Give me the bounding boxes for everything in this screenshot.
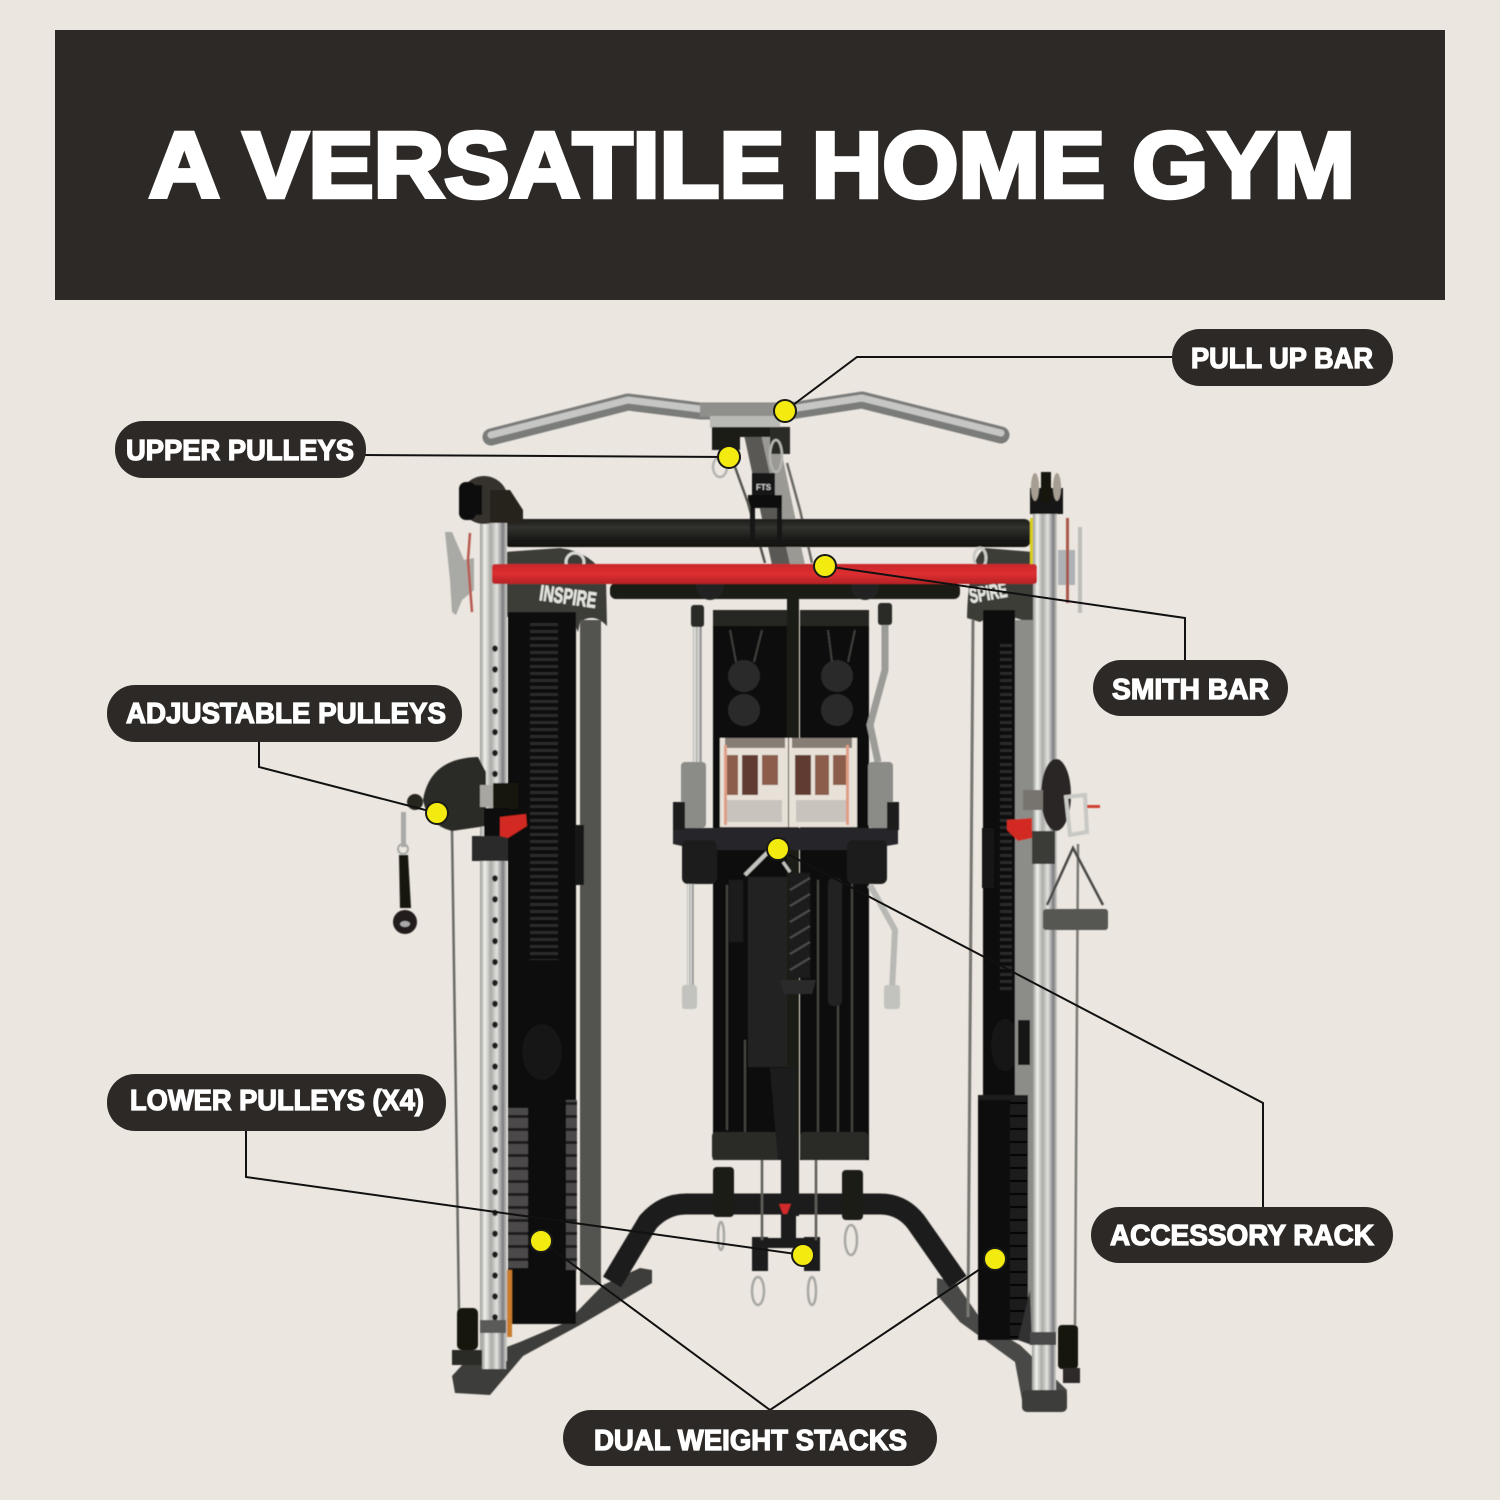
label: dual weight stacks: DUAL WEIGHT STACKS xyxy=(594,1425,907,1457)
title: A VERSATILE HOME GYM xyxy=(149,113,1355,217)
label: upper pulleys xyxy=(115,421,366,478)
left base xyxy=(452,1268,652,1395)
adjustable pulley right xyxy=(1007,759,1108,1325)
upper crossbar xyxy=(503,508,1031,547)
label: smith bar: SMITH BAR xyxy=(1112,674,1269,706)
marker dots xyxy=(426,400,1006,1270)
home gym machine xyxy=(393,398,1108,1412)
label: lower pulleys: LOWER PULLEYS (X4) xyxy=(130,1085,424,1117)
left shroud with logo: INSPIRE xyxy=(538,580,598,613)
right top pulley xyxy=(1030,472,1063,514)
accessory rack xyxy=(673,802,899,1160)
adjustable pulley left xyxy=(393,757,527,1312)
label: adjustable pulleys: ADJUSTABLE PULLEYS xyxy=(126,698,446,730)
right column stack xyxy=(968,610,1033,1345)
label: upper pulleys: UPPER PULLEYS xyxy=(126,435,354,467)
label: pull up bar: PULL UP BAR xyxy=(1191,343,1373,375)
right shroud with logo: SPIRE xyxy=(968,579,1009,608)
left chrome column xyxy=(480,516,508,1369)
callout lines xyxy=(246,357,1263,1410)
label: smith bar xyxy=(1093,660,1288,716)
label: accessory rack xyxy=(1091,1207,1393,1263)
lower center pulleys xyxy=(713,1158,863,1305)
label: pull up bar xyxy=(1172,329,1393,386)
left mounting plate xyxy=(445,532,474,615)
mast and cables: FTS xyxy=(756,483,772,492)
curved bar xyxy=(868,603,900,1009)
D handle xyxy=(1043,848,1108,930)
left shroud with logo xyxy=(505,548,607,632)
center weight towers xyxy=(712,596,869,1216)
arched base tube xyxy=(612,1204,958,1282)
smith bar beam below xyxy=(610,572,960,600)
straight bar xyxy=(681,605,706,1009)
right chrome column xyxy=(1030,513,1057,1390)
hanging handle xyxy=(393,812,417,934)
smith bar xyxy=(492,564,1037,584)
lower left pulley xyxy=(452,1308,482,1365)
exercise books xyxy=(720,738,857,827)
right mounting plate xyxy=(1058,518,1082,613)
label: lower pulleys xyxy=(107,1074,446,1131)
title banner xyxy=(55,30,1445,300)
label: adjustable pulleys xyxy=(107,685,462,742)
left top pulley xyxy=(459,476,523,524)
right shroud with logo xyxy=(967,518,1033,625)
mast and cables xyxy=(735,430,812,565)
left column stack xyxy=(507,612,601,1337)
right foot and base xyxy=(937,1278,1080,1412)
upper pulleys xyxy=(712,427,790,477)
pull up bar xyxy=(491,398,1001,437)
label: dual weight stacks xyxy=(563,1410,937,1466)
label: accessory rack: ACCESSORY RACK xyxy=(1110,1220,1374,1252)
